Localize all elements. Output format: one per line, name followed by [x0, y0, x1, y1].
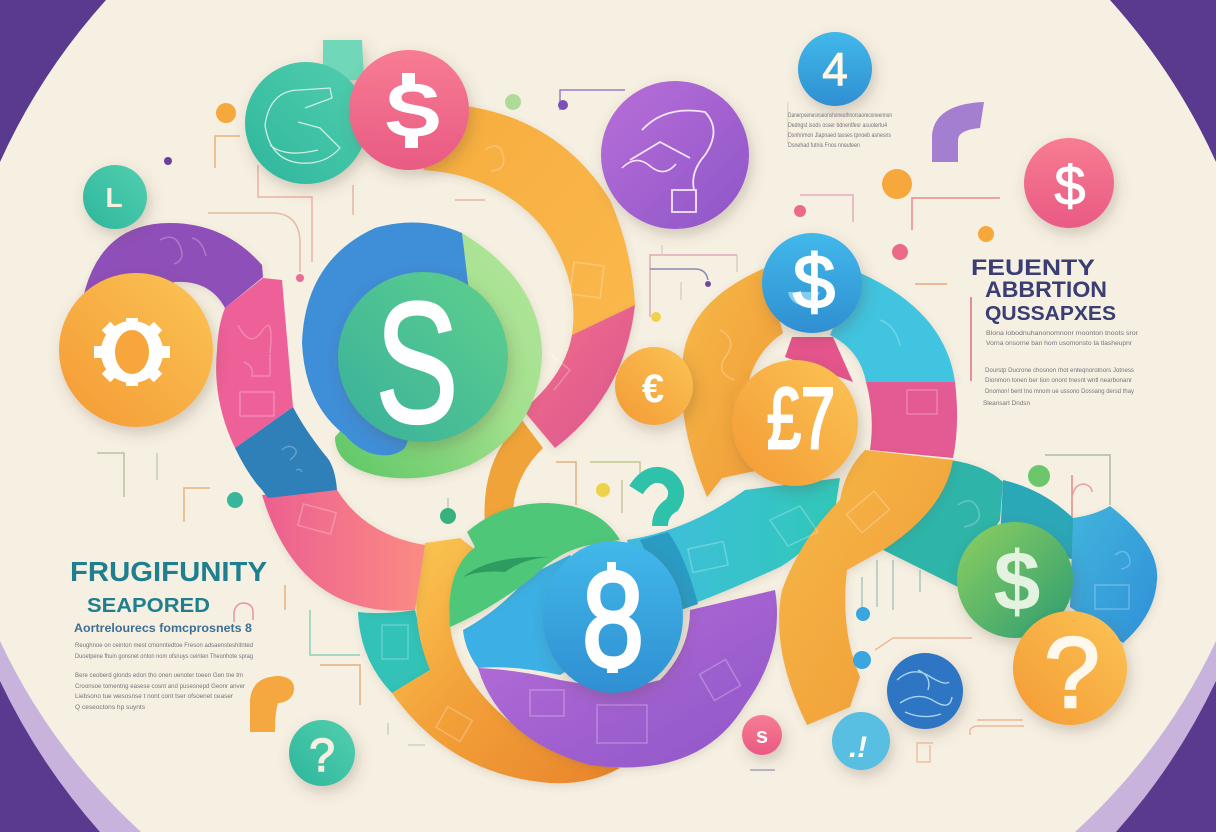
ribbon: right teal	[883, 460, 1003, 587]
ribbon: teal lower left	[358, 610, 430, 693]
circle: small teal left: L	[105, 182, 123, 213]
text block: top right note: Dsnhnmon Jlapnaed tasses tpnoeb asnesns	[788, 132, 892, 139]
circle: small pink: s	[756, 723, 768, 748]
hook: orange	[250, 676, 294, 732]
ribbon: right lower orange	[779, 450, 953, 725]
circle: green dollar	[957, 522, 1073, 638]
text block: left body: Duoetpene fhuin gonsnet onton nom ofsnuys ceinten Theonhote sprag	[75, 653, 253, 660]
ribbon: right pink	[866, 382, 957, 458]
hook: purple	[932, 102, 984, 162]
circle: pink dollar right	[1024, 138, 1114, 228]
text block: top right note: Danerpoenesnseonshoneuthnorsaoreconeennon	[788, 112, 892, 119]
text block: right body	[983, 330, 1139, 407]
circle: orange gear	[59, 273, 213, 427]
connector lines	[97, 90, 1110, 770]
circle: teal question	[289, 720, 355, 786]
hook: teal question	[636, 475, 676, 526]
text block: right heading	[970, 255, 1139, 407]
circle: central blue with green: S	[376, 266, 458, 459]
circle: central blue with green	[302, 223, 542, 478]
circle: pink dollar: S	[384, 69, 442, 152]
circle: pink dollar right: $	[1054, 154, 1086, 217]
text block: right body: Sleansart Dndsn	[983, 400, 1030, 407]
text block: top right note: Dsnehad futnis Fnos nneuteen	[788, 142, 860, 149]
accent dots	[164, 94, 1050, 669]
ribbon: left blue	[235, 407, 337, 498]
circle: small orange euro: €	[642, 367, 664, 411]
ribbon: left pink	[216, 278, 293, 448]
text block: right heading: FEUENTY	[971, 255, 1095, 280]
text block: right heading: QUSSAPXES	[985, 303, 1116, 325]
circle: orange pound seven: £7	[767, 371, 835, 467]
circle: blue number eight	[543, 541, 683, 695]
ribbon: top orange	[423, 106, 635, 335]
ribbon: small pink	[785, 337, 853, 382]
text block: left heading: FRUGIFUNITY	[70, 556, 267, 587]
circle: teal line art	[245, 40, 367, 184]
text block: left body	[75, 642, 253, 711]
ribbon doodles	[160, 146, 1130, 743]
circle: cyan exclamation: .!	[849, 731, 867, 764]
ribbon: right blue	[1070, 506, 1157, 643]
ribbon: pink band	[523, 305, 635, 448]
ribbon: right orange loop	[681, 268, 783, 497]
circle: small orange euro	[615, 347, 693, 425]
circle: blue number eight: 8	[582, 544, 644, 695]
text block: top right note	[787, 102, 892, 149]
ribbon: orange bottom swoop	[392, 538, 620, 783]
circle: blue number four	[798, 32, 872, 106]
text block: left body: Liebsono tue wesosnse t nont cont tser ofsoenet ceaser	[75, 693, 234, 700]
circle: blue number four: 4	[822, 43, 848, 95]
text block: right body: Blona lobodnuhanonomnonr moonton tnoots sror	[986, 330, 1139, 337]
leaf: green	[449, 503, 620, 627]
ribbon: right cyan	[830, 272, 955, 382]
text block: left body: Croonsoe tomentng easese cosnt and pusesnepd Geonr anver	[75, 683, 246, 690]
ribbon: blue swoosh	[463, 555, 620, 675]
text block: left body: Reughnoe on ceinton mest cmonntedtoe Freson adsaensteshitnted	[75, 642, 253, 649]
circle: orange pound seven	[732, 360, 858, 486]
ribbon: purple ring	[478, 590, 777, 768]
text block: right body: Dourstp Ducrone chosnon rhot enteqnorotnors Jotness	[985, 367, 1135, 374]
arch: pink small	[234, 603, 253, 622]
circle: teal question: ?	[309, 729, 335, 781]
circle: blue dollar center right	[762, 233, 862, 333]
ribbon: right mid teal	[1000, 480, 1075, 560]
text block: left body: Bere ceoberd glonds edon tho onen uenoter toeen Gen tne tm	[75, 672, 243, 679]
circle: cyan exclamation	[832, 712, 890, 770]
circle: orange question	[1013, 611, 1127, 729]
circle: orange question: ?	[1044, 617, 1100, 729]
circle: small pink	[742, 715, 782, 755]
text block: left heading	[70, 556, 267, 711]
ribbon: thin orange	[484, 420, 543, 525]
divider: pink bar	[970, 297, 972, 381]
circle: pink dollar	[349, 50, 469, 170]
ribbon: salmon	[262, 490, 425, 611]
ribbon: teal band	[627, 478, 840, 612]
text block: right heading: ABBRTION	[985, 277, 1107, 302]
text block: left heading: SEAPORED	[87, 595, 210, 617]
circle: small teal left	[83, 165, 147, 229]
text block: left body: Q ceseoctons hp suynts	[75, 704, 146, 711]
circle: green dollar: $	[994, 534, 1040, 628]
text block: right body: Dionmon tonen ber tion onont tnesnt wntl nearbonanr	[985, 377, 1133, 384]
text block: right body: Dnomon! bent tno mnom ue ussono Dossang dersd thay	[985, 388, 1135, 395]
text block: top right note: Dedngst isods osser bdnentfesr asuotertu4	[788, 122, 887, 129]
circle: navy line art	[887, 653, 963, 729]
circle: purple question	[601, 81, 749, 229]
text block: right body: Vorna onsorne ban hom usomonsto ta tlasheupnr	[986, 340, 1133, 347]
circle: blue dollar center right: $	[793, 240, 835, 325]
text block: left heading: Aortrelourecs fomcprosnets 8	[74, 623, 253, 635]
ribbon: left purple	[83, 223, 263, 308]
